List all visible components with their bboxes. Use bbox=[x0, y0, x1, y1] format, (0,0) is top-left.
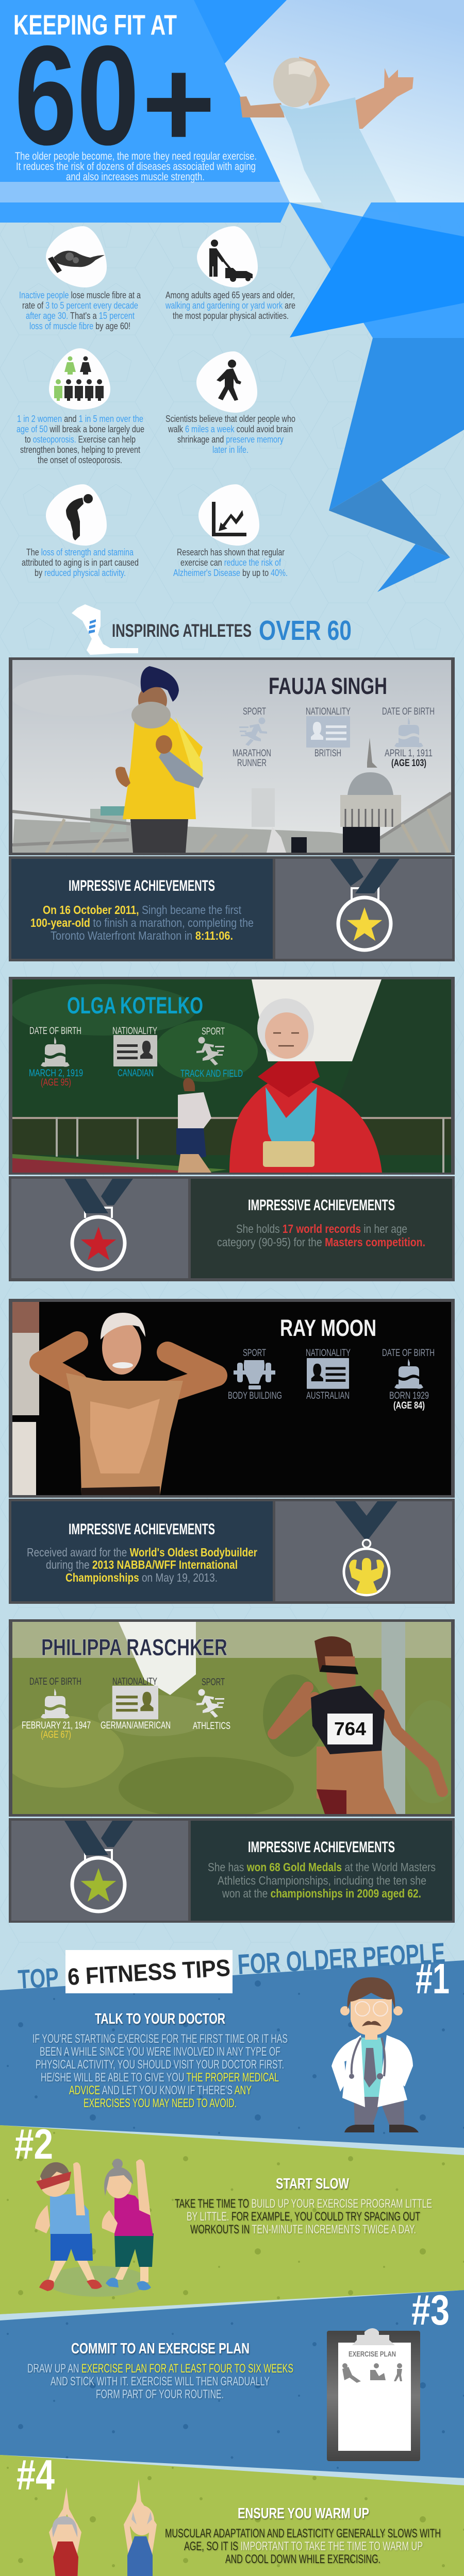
photo: sprinter with foliage: 764 bbox=[334, 1718, 366, 1739]
panel: fact strength bbox=[22, 484, 139, 578]
illustration: stretching couple bbox=[35, 2159, 154, 2297]
stats: DATE OF BIRTH bbox=[382, 706, 435, 717]
achievements panel: IMPRESSIVE ACHIEVEMENTS bbox=[69, 877, 215, 894]
stats: FEBRUARY 21, 1947 bbox=[22, 1720, 91, 1731]
icon: id card bbox=[112, 1686, 158, 1719]
frame bbox=[9, 1299, 455, 1498]
stats: NATIONALITY bbox=[306, 1348, 351, 1359]
text: The loss of strength and stamina bbox=[26, 547, 134, 557]
icon: green medal bbox=[64, 1821, 133, 1911]
heading: inspiring athletes: INSPIRING ATHLETES bbox=[112, 621, 252, 641]
name: RAY MOON bbox=[280, 1315, 376, 1341]
icon: runner bbox=[196, 1037, 224, 1065]
icon: cake bbox=[394, 1359, 423, 1389]
achievements panel: category (90-95) for the Masters competition. bbox=[217, 1235, 425, 1249]
blue band bbox=[0, 202, 290, 223]
stats: (AGE 103) bbox=[391, 758, 426, 769]
stats: TRACK AND FIELD bbox=[180, 1069, 243, 1079]
panel: hero bbox=[0, 0, 464, 223]
text: Research has shown that regular bbox=[177, 547, 285, 557]
photo: sprinter with foliage bbox=[0, 1622, 464, 1819]
stats: ATHLETICS bbox=[193, 1721, 230, 1732]
name: OLGA KOTELKO bbox=[67, 992, 203, 1019]
icon: gold medal bbox=[330, 859, 400, 950]
stats: GERMAN/AMERICAN bbox=[101, 1720, 171, 1731]
name: FAUJA SINGH bbox=[269, 673, 387, 699]
stats: BORN 1929 bbox=[389, 1391, 429, 1401]
panel: fact bones bbox=[16, 348, 144, 465]
illustration: doctor bbox=[332, 1977, 419, 2132]
tip 4: #4 bbox=[16, 2451, 55, 2499]
icon: id card bbox=[306, 716, 350, 748]
text: Scientists believe that older people who bbox=[165, 414, 295, 424]
icon: tired figure bbox=[46, 484, 107, 546]
tip text: EXERCISES YOU MAY NEED TO AVOID. bbox=[84, 2096, 237, 2110]
panel: fact gardening bbox=[165, 226, 295, 321]
stats: MARCH 2, 1919 bbox=[29, 1068, 83, 1079]
stats: (AGE 84) bbox=[393, 1400, 425, 1411]
text: Among adults aged 65 years and older, bbox=[165, 290, 295, 300]
text: shrinkage and preserve memory bbox=[177, 434, 284, 445]
heading: inspiring athletes bbox=[72, 604, 352, 655]
icon: walker bbox=[196, 351, 257, 413]
photo: bodybuilder bbox=[12, 1302, 451, 1495]
decorative blue shards bbox=[290, 202, 464, 592]
icon: id card bbox=[307, 1358, 349, 1389]
icon: falling chart bbox=[198, 484, 259, 546]
icon: red medal bbox=[64, 1179, 133, 1269]
text bbox=[173, 547, 288, 578]
achievements panel: 100-year-old to finish a marathon, completing the bbox=[30, 916, 254, 929]
stats: RUNNER bbox=[237, 758, 267, 769]
stats bbox=[29, 1026, 243, 1088]
achievements panel: during the 2013 NABBA/WFF International bbox=[46, 1558, 238, 1571]
achievements panel: Toronto Waterfront Marathon in 8:11:06. bbox=[51, 929, 233, 942]
tip text bbox=[32, 2032, 288, 2110]
tip text: AND COOL DOWN WHILE EXERCISING. bbox=[225, 2552, 380, 2566]
panel: fact muscle bbox=[19, 226, 141, 331]
achievements panel: won at the championships in 2009 aged 62. bbox=[222, 1887, 421, 1900]
tip 3: COMMIT TO AN EXERCISE PLAN bbox=[71, 2341, 250, 2357]
icon: id card bbox=[113, 1035, 157, 1066]
name: PHILIPPA RASCHKER bbox=[41, 1634, 227, 1660]
tip 4: ENSURE YOU WARM UP bbox=[238, 2505, 369, 2522]
intro paragraph bbox=[15, 150, 257, 183]
text: Alzheimer's Disease by up to 40%. bbox=[173, 568, 288, 578]
stats bbox=[22, 1676, 230, 1740]
text: to osteoporosis. Exercise can help bbox=[25, 434, 136, 445]
intro paragraph: and also increases muscle strength. bbox=[66, 171, 205, 183]
text: age of 50 will break a bone largely due bbox=[16, 424, 144, 434]
big number: + bbox=[142, 32, 216, 174]
stats: NATIONALITY bbox=[112, 1026, 157, 1037]
frame bbox=[9, 657, 455, 855]
text bbox=[165, 414, 295, 455]
tip text: FORM PART OF YOUR ROUTINE. bbox=[96, 2387, 224, 2401]
frame bbox=[9, 1619, 455, 1817]
text: by reduced physical activity. bbox=[35, 568, 126, 578]
heading: top 6 fitness tips: TOP bbox=[17, 1963, 60, 1995]
achievements panel: IMPRESSIVE ACHIEVEMENTS bbox=[69, 1521, 215, 1538]
icon: people bbox=[49, 348, 110, 410]
stats: (AGE 95) bbox=[41, 1077, 71, 1088]
tip text: ADVICE AND LET YOU KNOW IF THERE'S ANY bbox=[69, 2083, 252, 2097]
icon: runner bbox=[196, 1689, 224, 1718]
tip 2 bbox=[14, 2120, 432, 2297]
tip text: BEEN A WHILE SINCE YOU WERE INVOLVED IN ANY TYPE OF bbox=[40, 2045, 280, 2059]
text: 1 in 2 women and 1 in 5 men over the bbox=[17, 414, 143, 424]
tip text bbox=[175, 2197, 432, 2236]
tip text: DRAW UP AN EXERCISE PLAN FOR AT LEAST FOUR TO SIX WEEKS bbox=[27, 2362, 293, 2376]
sky photo background bbox=[225, 0, 464, 202]
heading: top 6 fitness tips bbox=[17, 1937, 446, 1995]
achievements panel: Received award for the World's Oldest Bodybuilder bbox=[27, 1546, 257, 1559]
stats: SPORT bbox=[243, 1348, 266, 1359]
panel: Ray Moon bbox=[9, 1299, 455, 1604]
tip 3: #3 bbox=[411, 2286, 450, 2334]
stats bbox=[228, 1348, 435, 1411]
icon: bodybuilder medal bbox=[335, 1501, 397, 1595]
tip text bbox=[27, 2362, 293, 2401]
stats: SPORT bbox=[202, 1677, 225, 1688]
icon: running shoe bbox=[72, 604, 138, 655]
stats: DATE OF BIRTH bbox=[29, 1676, 81, 1687]
achievements panel: Championships on May 19, 2013. bbox=[65, 1571, 218, 1584]
text: the onset of osteoporosis. bbox=[38, 455, 122, 465]
stats: MARATHON bbox=[233, 748, 271, 759]
stats: BRITISH bbox=[314, 748, 341, 759]
achievements panel bbox=[9, 856, 455, 961]
icon: cake bbox=[41, 1037, 70, 1067]
tip text: HE/SHE WILL BE ABLE TO GIVE YOU THE PROPER MEDICAL bbox=[41, 2071, 279, 2084]
title: KEEPING FIT AT bbox=[13, 9, 177, 41]
text: loss of muscle fibre by age 60! bbox=[29, 321, 130, 331]
icon: muscle bbox=[46, 226, 107, 287]
achievements panel: On 16 October 2011, Singh became the first bbox=[43, 903, 242, 917]
achievements panel: She holds 17 world records in her age bbox=[236, 1222, 407, 1235]
photo: runner and St Pauls bbox=[10, 660, 451, 853]
text bbox=[19, 290, 141, 331]
text: later in life. bbox=[212, 445, 248, 455]
page background pattern bbox=[0, 223, 464, 1974]
achievements panel: She has won 68 Gold Medals at the World Masters bbox=[208, 1860, 436, 1874]
icon: runner bbox=[239, 717, 267, 746]
stats: SPORT bbox=[202, 1026, 225, 1037]
tip 2: #2 bbox=[14, 2120, 53, 2168]
tip text: AND STICK WITH IT. EXERCISE WILL THEN GRADUALLY bbox=[51, 2375, 270, 2388]
tip 4 bbox=[7, 2451, 441, 2576]
illustration: clipboard bbox=[327, 2328, 420, 2461]
photo: man with open arms bbox=[240, 57, 413, 223]
stats: DATE OF BIRTH bbox=[29, 1026, 81, 1037]
icon: lawn mower bbox=[197, 226, 258, 287]
intro paragraph: It reduces the risk of dozens of diseases associated with aging bbox=[16, 161, 256, 173]
achievements panel bbox=[9, 1818, 455, 1923]
stats: BODY BUILDING bbox=[228, 1391, 282, 1401]
tip 3 bbox=[27, 2286, 450, 2461]
panel: fact alzheimers bbox=[173, 484, 288, 578]
dark blue triangle bbox=[194, 0, 287, 63]
panel: Philippa Raschker bbox=[0, 1619, 464, 1923]
text bbox=[22, 547, 139, 578]
icon: cake bbox=[394, 717, 423, 748]
tip 2: START SLOW bbox=[276, 2176, 349, 2192]
icon: fist and dumbbell bbox=[234, 1360, 275, 1389]
tip backgrounds bbox=[0, 1960, 464, 2576]
stats: APRIL 1, 1911 bbox=[385, 748, 433, 759]
text: exercise can reduce the risk of bbox=[180, 557, 281, 568]
panel: fact walking bbox=[165, 351, 295, 455]
text: attributed to aging is in part caused bbox=[22, 557, 139, 568]
text bbox=[165, 290, 295, 321]
panel: Fauja Singh bbox=[9, 657, 455, 961]
heading: top 6 fitness tips: 6 FITNESS TIPS bbox=[67, 1954, 231, 1990]
achievements panel: Athletics Championships, including the ten she bbox=[218, 1874, 426, 1887]
big number: 60 bbox=[14, 16, 139, 175]
pale band bbox=[0, 182, 290, 202]
stats: NATIONALITY bbox=[112, 1676, 157, 1687]
illustration: clipboard: EXERCISE PLAN bbox=[349, 2350, 396, 2359]
text: the most popular physical activities. bbox=[173, 311, 289, 321]
intro paragraph: The older people become, the more they need regular exercise. bbox=[15, 150, 257, 162]
text: strengthen bones, helping to prevent bbox=[20, 445, 140, 455]
text: Inactive people lose muscle fibre at a bbox=[19, 290, 141, 300]
illustration: yoga couple bbox=[7, 2479, 201, 2576]
achievements panel: IMPRESSIVE ACHIEVEMENTS bbox=[248, 1197, 395, 1214]
tip text bbox=[165, 2527, 441, 2566]
tip 1: #1 bbox=[416, 1955, 450, 2003]
text bbox=[16, 414, 144, 465]
stats: SPORT bbox=[243, 706, 266, 717]
tip text: IF YOU'RE STARTING EXERCISE FOR THE FIRST TIME OR IT HAS bbox=[32, 2032, 288, 2046]
stats bbox=[233, 706, 435, 769]
tip 1 bbox=[32, 1955, 450, 2132]
text: rate of 3 to 5 percent every decade bbox=[22, 300, 138, 311]
panel: Olga Kotelko bbox=[9, 977, 455, 1281]
stats: NATIONALITY bbox=[306, 706, 351, 717]
stats: DATE OF BIRTH bbox=[382, 1348, 435, 1359]
text: after age 30. That's a 15 percent bbox=[26, 311, 135, 321]
achievements panel bbox=[9, 1176, 455, 1281]
stats: (AGE 67) bbox=[41, 1730, 71, 1740]
white label bbox=[65, 1950, 233, 1993]
icon: cake bbox=[41, 1688, 70, 1719]
icons: exercises bbox=[342, 2363, 402, 2383]
achievements panel: IMPRESSIVE ACHIEVEMENTS bbox=[248, 1839, 395, 1856]
photo: woman with medals on track bbox=[10, 979, 451, 1173]
heading: inspiring athletes: OVER 60 bbox=[259, 615, 352, 646]
text: walk 6 miles a week could avoid brain bbox=[168, 424, 293, 434]
text: walking and gardening or yard work are bbox=[165, 300, 295, 311]
tip text: PHYSICAL ACTIVITY, YOU SHOULD VISIT YOUR DOCTOR FIRST. bbox=[36, 2058, 284, 2072]
frame bbox=[9, 977, 455, 1175]
stats: CANADIAN bbox=[118, 1068, 154, 1079]
tip 1: TALK TO YOUR DOCTOR bbox=[95, 2011, 225, 2027]
stats: AUSTRALIAN bbox=[306, 1391, 350, 1401]
achievements panel bbox=[9, 1499, 455, 1604]
